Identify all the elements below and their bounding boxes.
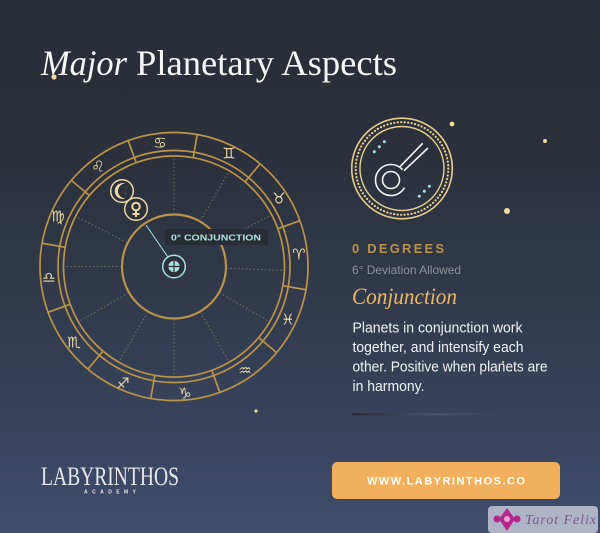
- heading: conjunction: Conjunction: [352, 284, 457, 309]
- button: website: [332, 462, 560, 499]
- watermark: Tarot Felix: Tarot Felix: [525, 513, 597, 528]
- icon: venus: [125, 198, 147, 220]
- wheel rings: [40, 132, 308, 400]
- zodiac glyphs: ♑: [178, 384, 192, 402]
- icon: earth: [163, 255, 185, 278]
- logo: Labyrinthos Academy: LABYRINTHOS: [41, 462, 179, 491]
- zodiac glyphs: ♒: [238, 362, 252, 380]
- zodiac glyphs: ♏: [67, 334, 81, 352]
- chart: astrological wheel: [40, 132, 308, 402]
- zodiac glyphs: ♐: [116, 374, 130, 392]
- aspect label: 0° CONJUNCTION: [171, 232, 261, 242]
- logo: Labyrinthos Academy: ACADEMY: [84, 490, 137, 496]
- aspect line: [146, 225, 168, 256]
- text: description: other. Positive when planets are: [352, 360, 548, 376]
- icon: lotus: [494, 508, 520, 531]
- zodiac glyphs: ♊: [222, 144, 236, 162]
- zodiac glyphs: ♈: [292, 246, 306, 264]
- logo: Labyrinthos Academy: [41, 462, 179, 496]
- aspect label: [165, 229, 268, 245]
- zodiac glyphs: ♉: [272, 190, 286, 208]
- zodiac glyphs: ♍: [51, 208, 65, 226]
- zodiac glyphs: ♓: [281, 310, 295, 328]
- text: description: Planets in conjunction work: [352, 320, 523, 336]
- icon: moon: [111, 180, 133, 202]
- icon: conjunction badge: [352, 118, 452, 219]
- heading: degrees: 0 DEGREES: [352, 241, 444, 256]
- zodiac glyphs: [42, 134, 306, 402]
- zodiac glyphs: ♌: [91, 158, 105, 176]
- text: description: together, and intensify each: [352, 340, 524, 356]
- zodiac glyphs: ♎: [42, 268, 56, 286]
- title: Major: [40, 43, 128, 83]
- divider rule: [352, 413, 520, 416]
- stars: [51, 74, 547, 413]
- text: description: [352, 320, 548, 395]
- text: deviation allowed: 6° Deviation Allowed: [352, 263, 461, 277]
- button: website: WWW.LABYRINTHOS.CO: [367, 476, 525, 488]
- zodiac glyphs: ♋: [153, 134, 167, 152]
- text: description: in harmony.: [352, 379, 424, 395]
- title: Planetary Aspects: [136, 43, 397, 83]
- watermark: Tarot Felix: [488, 506, 598, 533]
